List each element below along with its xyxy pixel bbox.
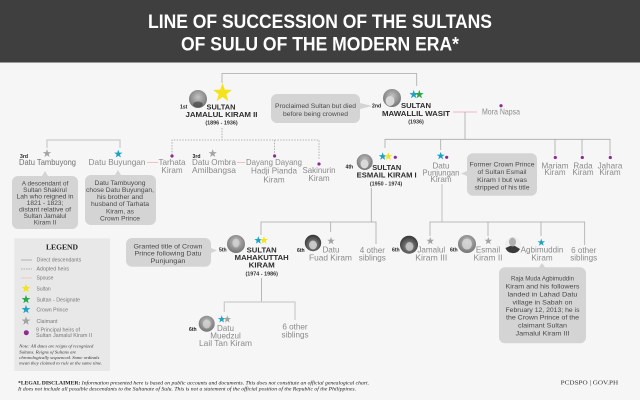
heir: Dayang Dayang Hadji Pianda Kiram: Kiram [263,176,285,184]
text: 6 other siblings (Mahakuttah): 6 other [282,323,308,332]
legend panel: Sultans. Reigns of Sultans are [19,349,76,354]
heir: Mariam Kiram: Mariam [542,161,569,170]
heir: Rada Kiram [572,156,594,177]
heir: Dayang Dayang Hadji Pianda Kiram [246,154,302,184]
callout: Buyungan note: Kiram, as [106,208,135,216]
sultan: Jamalul Kiram II: SULTAN [206,102,236,112]
callout: former crown prince: of Sultan Esmail [478,169,527,176]
callout: granted title [126,238,217,267]
callout: Buyungan note: Datu Tambuyong [94,180,146,187]
claimant: Datu Tambuyong: 3rd [20,154,28,160]
legend panel: Sultan Jamalul Kiram II [36,333,92,339]
heir: Dayang Dayang Hadji Pianda Kiram: Dayang Dayang [246,158,302,167]
crown prince: Datu Buyungan [88,150,146,167]
claimant: Esmail Kiram II [450,235,502,262]
text: 6 other siblings (Mahakuttah) [282,323,308,339]
crown prince: Agbimuddin Kiram [505,237,563,262]
crown prince: Agbimuddin Kiram: Kiram [531,253,553,262]
text: 6 other siblings: 6 other [571,246,597,255]
callout: Buyungan note: chose Datu Buyungan, [86,187,154,194]
callout: Buyungan note: husband of Tarhata [91,201,149,208]
callout: Tambuyong note: Kiram II [34,219,56,226]
crown prince: Datu Buyungan: Datu Buyungan [88,158,146,167]
callout: Raja Muda Agbimuddin: Raja Muda Agbimuddin [511,276,574,283]
sultan: Esmail Kiram I: 4th [346,164,353,170]
sultan: Esmail Kiram I: SULTAN [372,163,401,172]
sultan: Mawallil Wasit: MAWALLIL WASIT [382,109,450,118]
legend panel: Crown Prince [36,308,68,314]
claimant: Esmail Kiram II: 6th [450,248,458,254]
crown prince: Datu Punjungan Kiram: Kiram [430,175,452,184]
text: 6 other siblings: siblings [570,254,597,262]
legend panel: chronologically sequenced. Some ordinals [19,355,100,360]
title banner: OF SULU OF THE MODERN ERA* [181,34,459,56]
heir: Sakinurin Kiram: Kiram [308,174,330,183]
legend panel: Spouse [36,276,54,282]
legal disclaimer: *LEGAL DISCLAIMER: Information presented here is based on public accounts and documents. This does not constitute an official genealogical chart. [18,379,369,386]
sultan: Esmail Kiram I: (1950 - 1974) [370,182,402,188]
text: 6 other siblings (Mahakuttah): siblings [282,330,308,339]
claimant: Esmail Kiram II: Kiram II [474,253,502,262]
heir: Mariam Kiram [542,156,569,177]
title banner: LINE OF SUCCESSION OF THE SULTANS [148,11,492,33]
legend panel: mean they claimed to rule at the same time. [19,361,102,366]
connector lines: family tree [47,74,610,320]
sultan: Mahakuttah Kiram: MAHAKUTTAH [235,253,289,262]
claimant: Datu Muedzul Lail Tan Kiram: 6th [189,327,197,333]
callout: Tambuyong note: distant relative of [19,206,71,213]
callout: Buyungan note: his brother and [97,194,143,201]
sultan: Jamalul Kiram II: 1st [180,104,188,110]
legend panel: Sultan - Designate [36,298,80,304]
claimant: Datu Muedzul Lail Tan Kiram [189,315,252,348]
heir: Jahara Kiram [598,156,623,177]
callout: granted title: Punjungan [150,258,186,265]
sultan: Mahakuttah Kiram [219,235,289,277]
callout: Raja Muda Agbimuddin: claimant Sultan [518,323,567,330]
sultan: Mawallil Wasit: 2nd [372,104,381,110]
text: 4 other siblings [359,246,386,262]
legend panel: Claimant [36,319,58,325]
sultan: Mahakuttah Kiram: SULTAN [247,245,277,254]
claimant: Datu Muedzul Lail Tan Kiram: Muedzul [210,332,241,341]
legal disclaimer: It does not include all possible descendants to the Sultanate of Sulu. This is not a statement of the official position of the Republic of the Philippines. [17,385,356,392]
callout: Tambuyong note: Lah who reigned in [16,193,74,200]
callout: former crown prince [461,153,537,196]
callout: Tambuyong note: 1821 - 1823; [27,200,63,207]
sultan: Jamalul Kiram II: (1896 - 1936) [205,120,238,126]
credit: PCDSPO | GOV.PH [561,381,619,387]
heir: Mariam Kiram: Kiram [544,168,566,177]
text: 6 other siblings [570,246,597,262]
crown prince: Datu Punjungan Kiram: Datu [432,162,450,171]
sultan: Esmail Kiram I: ESMAIL KIRAM I [357,171,417,180]
claimant: Esmail Kiram II: Esmail [476,246,500,255]
heir: Sakinurin Kiram [302,162,336,183]
claimant: Jamalul Kiram III: 6th [392,248,400,254]
sultan: Mawallil Wasit: SULTAN [401,101,431,110]
claimant: Datu Ombra Amilbangsa: Datu Ombra [192,158,236,167]
crown prince: Agbimuddin Kiram: Agbimuddin [521,246,563,255]
legend panel: LEGEND [46,242,79,252]
callout: proclaimed sultan [271,94,372,123]
spouse: Mora Napsa [482,104,520,116]
callout: former crown prince: Former Crown Prince [470,161,535,168]
callout: Raja Muda Agbimuddin: February 12, 2013; he is [506,307,580,314]
claimant: Datu Ombra Amilbangsa: 3rd [192,154,200,160]
sultan: Mawallil Wasit: (1936) [408,120,424,126]
claimant: Jamalul Kiram III [392,236,447,262]
sultan: Mahakuttah Kiram: KIRAM [249,261,275,270]
callout: former crown prince: Kiram I but was [477,177,528,184]
claimant: Datu Tambuyong [19,149,76,167]
legend panel [14,238,110,371]
claimant: Jamalul Kiram III: Kiram III [415,253,447,262]
crown prince: Datu Punjungan Kiram: Punjungan [422,168,460,177]
heir: Rada Kiram: Rada [573,161,593,170]
callout: Tambuyong note: Sultan Jamalul [24,213,67,220]
claimant: Datu Ombra Amilbangsa: Amilbangsa [192,166,237,175]
legend panel: Direct descendants [37,258,82,264]
descendant: Datu Fuad Kiram: Fuad Kiram [309,253,352,262]
callout: Raja Muda Agbimuddin: Jamalul Kiram III [516,330,570,337]
sultan: Mahakuttah Kiram: 5th [219,248,227,254]
legend panel: Note: All dates are reigns of recognized [18,344,94,349]
callout: Raja Muda Agbimuddin: Kiram and his followers [506,284,580,291]
callout: Raja Muda Agbimuddin: landed in Lahad Datu [508,291,578,298]
heir: Tarhata Kiram: Kiram [161,166,183,175]
sultan: Jamalul Kiram II [180,83,258,126]
text: 4 other siblings: siblings [359,254,386,262]
callout: Tambuyong note: Sultan Shakirul [23,187,67,194]
title banner [0,0,640,62]
claimant: Jamalul Kiram III: Jamalul [417,246,445,255]
sultan: Jamalul Kiram II: JAMALUL KIRAM II [186,110,258,119]
heir: Rada Kiram: Kiram [572,168,594,177]
heir: Jahara Kiram: Jahara [598,161,623,170]
heir: Dayang Dayang Hadji Pianda Kiram: Hadji Pianda [251,166,297,176]
heir: Tarhata Kiram: Tarhata [158,158,186,167]
sultan: Mahakuttah Kiram: (1974 - 1986) [246,271,278,277]
callout: granted title: Granted title of Crown [134,243,203,250]
callout: Buyungan note [85,170,156,225]
heir: Jahara Kiram: Kiram [599,168,621,177]
callout: former crown prince: stripped of his title [474,185,530,192]
callout: granted title: Prince following Datu [134,251,202,258]
legend panel: Sultan [36,286,51,292]
callout: Buyungan note: Crown Prince [100,216,140,223]
callout: Raja Muda Agbimuddin [499,263,586,343]
callout: Raja Muda Agbimuddin: village in Sabah on [512,299,573,306]
claimant: Datu Muedzul Lail Tan Kiram: Lail Tan Kiram [199,339,252,348]
claimant: Datu Tambuyong: Datu Tambuyong [19,158,76,167]
callout: Tambuyong note: A descendant of [22,180,69,187]
claimant: Datu Muedzul Lail Tan Kiram: Datu [217,324,234,333]
text: 4 other siblings: 4 other [360,246,385,255]
descendant: Datu Fuad Kiram [297,235,352,262]
spouse: Mora Napsa: Mora Napsa [482,107,520,116]
legend panel: 9 Principal heirs of [36,328,81,334]
callout: proclaimed sultan: before being crowned [283,111,348,118]
descendant: Datu Fuad Kiram: Datu [322,246,340,255]
descendant: Datu Fuad Kiram: 6th [297,248,305,254]
claimant: Datu Ombra Amilbangsa [192,149,237,175]
callout: proclaimed sultan: Proclaimed Sultan but died [275,103,356,110]
callout: Raja Muda Agbimuddin: the Crown Prince of the [506,315,579,322]
heir: Tarhata Kiram [158,154,186,175]
sultan: Mawallil Wasit [372,89,450,126]
crown prince: Datu Punjungan Kiram [422,152,460,184]
heir: Sakinurin Kiram: Sakinurin [302,166,336,175]
sultan: Esmail Kiram I [346,152,417,188]
callout: Tambuyong note [12,171,78,229]
legal disclaimer [17,379,369,392]
legend panel: Adopted heirs [36,266,70,272]
